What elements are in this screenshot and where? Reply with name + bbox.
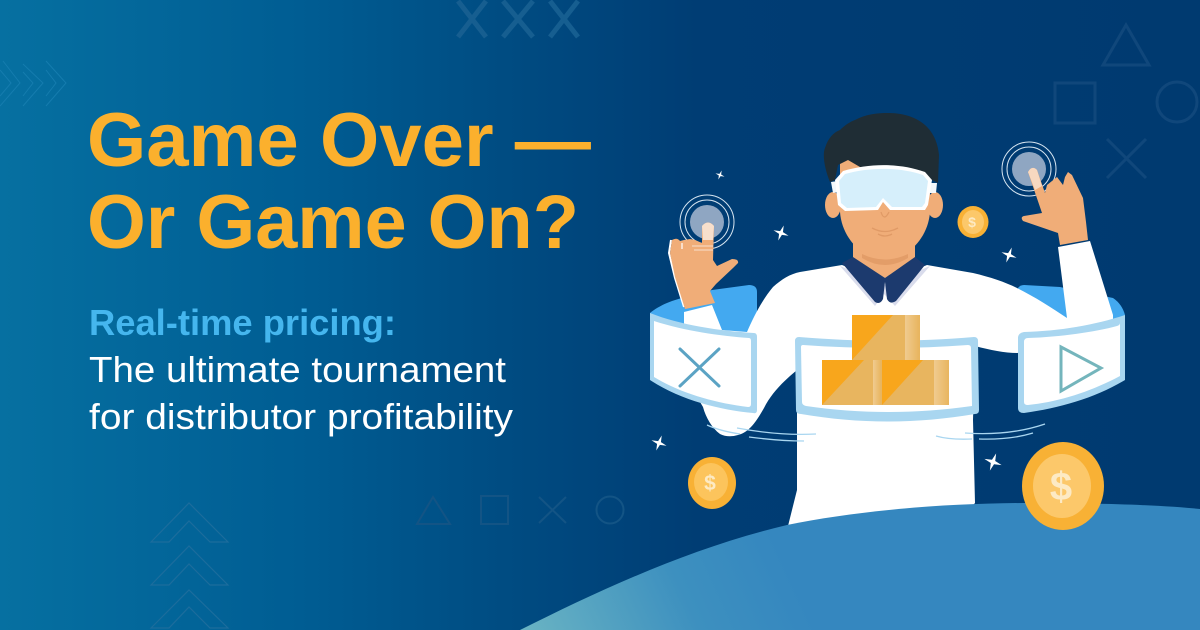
coin left xyxy=(688,457,736,509)
coin right xyxy=(1022,442,1104,530)
ears xyxy=(825,192,841,218)
motion lines xyxy=(707,424,1045,441)
touch ripple left xyxy=(680,195,734,249)
subtitle xyxy=(89,302,513,437)
nose and smile xyxy=(872,212,898,236)
touch ripple right xyxy=(1002,142,1056,196)
box top xyxy=(852,315,920,360)
title: Game Over — xyxy=(87,98,591,183)
goggles xyxy=(831,181,937,193)
decorative icons: top right game symbols xyxy=(1055,25,1197,178)
title xyxy=(87,98,591,265)
subtitle: Real-time pricing: xyxy=(89,302,396,343)
title: Or Game On? xyxy=(87,180,579,265)
blue back panels xyxy=(650,285,1125,340)
box left xyxy=(822,360,882,405)
figure head xyxy=(824,113,943,278)
subtitle: for distributor profitability xyxy=(89,396,513,437)
hair xyxy=(824,113,939,183)
decorative icons: up chevrons xyxy=(151,503,228,628)
boxes xyxy=(822,315,949,405)
hill xyxy=(520,503,1200,630)
decorative icons: left chevrons xyxy=(0,61,66,106)
chin shade xyxy=(862,254,908,265)
icon: play triangle xyxy=(1061,347,1101,391)
subtitle: The ultimate tournament xyxy=(89,349,506,390)
coin left: $ xyxy=(704,472,716,495)
face xyxy=(840,160,930,260)
hand left xyxy=(669,222,738,309)
panel left xyxy=(650,313,757,413)
figure shirt xyxy=(684,241,1113,526)
decorative icons: bottom game symbols xyxy=(417,496,624,524)
coin small top: $ xyxy=(968,214,976,230)
panel right xyxy=(1018,315,1125,413)
torso and arms xyxy=(684,241,1113,526)
decorative icons: top X row xyxy=(458,1,578,37)
sparkles xyxy=(649,169,1019,474)
hand right xyxy=(1022,168,1088,245)
box right xyxy=(882,360,949,405)
neck xyxy=(853,235,915,278)
icon: X xyxy=(680,349,719,386)
collar xyxy=(840,266,930,306)
panel center xyxy=(795,337,979,422)
coin right: $ xyxy=(1050,465,1072,509)
coin small top xyxy=(958,206,988,238)
